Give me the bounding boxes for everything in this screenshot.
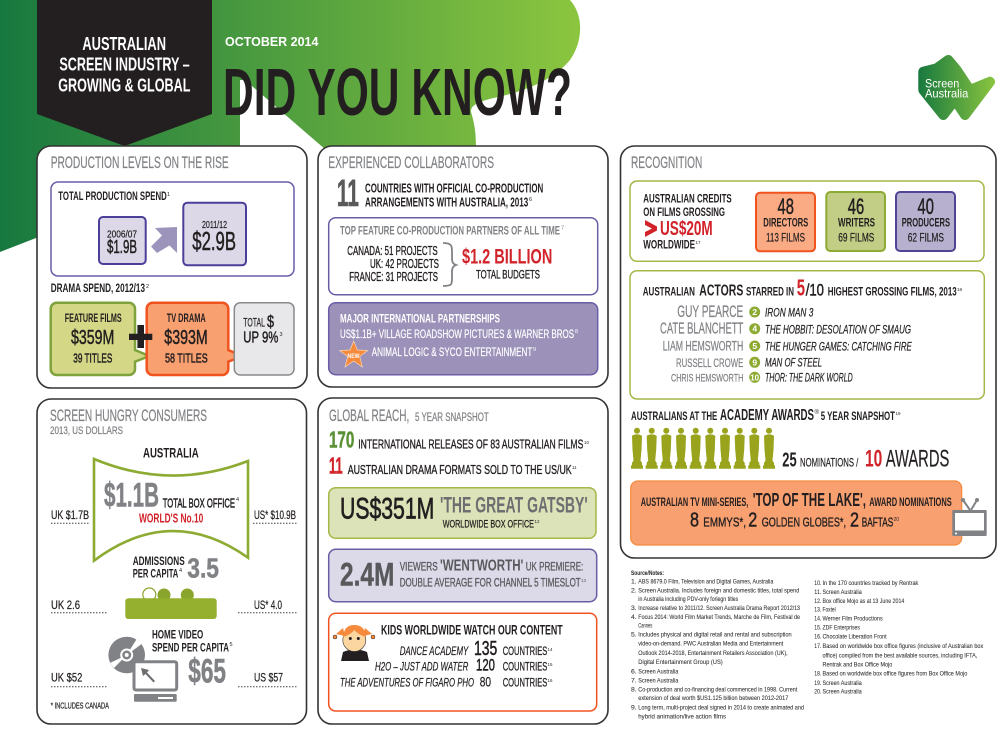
- top partners box: $1.2 BILLION: [462, 245, 552, 268]
- drama formats: AUSTRALIAN DRAMA FORMATS SOLD TO THE US/UK: [348, 462, 572, 477]
- box office figures: [104, 477, 239, 525]
- rank badges: 4: [752, 324, 757, 334]
- academy awards heading: ®: [814, 409, 820, 416]
- top partners box: UK: 42 PROJECTS: [370, 257, 439, 271]
- box office figures: $1.1B: [104, 477, 159, 515]
- banner title: SCREEN INDUSTRY –: [59, 54, 190, 75]
- show rows: THE ADVENTURES OF FIGARO PHO: [340, 676, 474, 690]
- actor names: RUSSELL CROWE: [676, 356, 743, 370]
- directors box: 113 FILMS: [766, 231, 805, 245]
- admissions: [133, 553, 219, 584]
- source notes: 8.: [631, 686, 637, 693]
- awards counts: [782, 446, 949, 473]
- top of the lake box: 'TOP OF THE LAKE',: [753, 490, 866, 510]
- writers box: [826, 192, 885, 251]
- box office figures: TOTAL BOX OFFICE: [163, 496, 235, 510]
- banner title: [58, 33, 190, 95]
- us admissions: [238, 598, 298, 613]
- film titles: [765, 306, 912, 385]
- actors heading: 5: [797, 275, 805, 301]
- wentworth box: 'WENTWORTH': [440, 558, 523, 575]
- producers box: 62 FILMS: [908, 231, 944, 245]
- source notes: 17.: [814, 643, 821, 650]
- source notes: in Australia including PDV-only foriegn titles: [638, 596, 739, 603]
- credits box: ON FILMS GROSSING: [643, 205, 725, 219]
- wentworth box: 2.4M: [340, 557, 394, 593]
- uk box office: UK $1.7B: [51, 508, 89, 522]
- heading: GLOBAL REACH,: [329, 407, 409, 425]
- heading: PRODUCTION LEVELS ON THE RISE: [51, 154, 229, 172]
- actors heading: 18: [957, 287, 963, 292]
- tv drama box: TV DRAMA: [167, 313, 206, 325]
- source notes: 11.: [814, 589, 821, 596]
- source notes: Foxtel: [822, 607, 836, 614]
- gatsby box: 12: [534, 519, 540, 524]
- show rows: 16: [548, 678, 553, 683]
- australia label: AUSTRALIA: [143, 444, 199, 460]
- top partners box: FRANCE: 31 PROJECTS: [349, 270, 438, 284]
- credits box: 17: [696, 240, 701, 245]
- icon: girl: [333, 625, 375, 661]
- actors heading: [643, 275, 963, 301]
- actor names: LIAM HEMSWORTH: [663, 339, 743, 354]
- top of the lake box: GOLDEN GLOBES*,: [762, 515, 846, 530]
- top of the lake box: 2: [850, 510, 859, 532]
- rank badges: 10: [750, 373, 760, 382]
- awards counts: 25: [782, 450, 797, 472]
- gatsby box: WORLDWIDE BOX OFFICE: [443, 518, 534, 530]
- international releases: [329, 427, 590, 453]
- icon: new star: [340, 341, 368, 367]
- total up box: UP 9%: [243, 330, 278, 347]
- writers box: 69 FILMS: [838, 231, 874, 245]
- awards counts: AWARDS: [886, 446, 949, 473]
- panel: global reach: [318, 398, 608, 724]
- home video: SPEND PER CAPITA: [152, 641, 229, 655]
- wentworth box: DOUBLE AVERAGE FOR CHANNEL 5 TIMESLOT: [400, 576, 581, 590]
- academy awards heading: 19: [896, 411, 901, 416]
- actors box: [630, 271, 984, 399]
- plus sign: [129, 325, 152, 348]
- rank badges: [749, 306, 760, 383]
- heading: EXPERIENCED COLLABORATORS: [328, 154, 494, 172]
- uk home video: UK $52: [51, 671, 83, 685]
- top of the lake box: 20: [894, 517, 899, 523]
- top of the lake box: [631, 481, 962, 545]
- source notes: [631, 570, 984, 721]
- us box office: [253, 508, 297, 523]
- partnerships box: 9: [533, 347, 536, 353]
- source notes: Increase relative to 2011/12. Screen Australia Drama Report 2012/13: [638, 605, 800, 612]
- heading suffix: 5 YEAR SNAPSHOT: [415, 412, 489, 424]
- awards counts: 10: [865, 446, 882, 473]
- film titles: THOR: THE DARK WORLD: [765, 371, 853, 385]
- source notes: 3.: [631, 605, 637, 612]
- actors heading: AUSTRALIAN: [643, 285, 695, 299]
- admissions: PER CAPITA: [133, 567, 179, 581]
- actors heading: STARRED IN: [746, 285, 794, 299]
- show rows: DANCE ACADEMY: [400, 644, 469, 658]
- source notes: Focus 2014: World Film Market Trends, Marche de Film, Festival de: [638, 614, 800, 621]
- total up box: [234, 303, 294, 375]
- show rows: [340, 638, 553, 690]
- source notes: 19.: [814, 680, 821, 687]
- source notes: Digital Entertainment Group (US): [638, 659, 723, 666]
- total production spend box: TOTAL PRODUCTION SPEND: [58, 191, 167, 203]
- heading: SCREEN HUNGRY CONSUMERS: [50, 407, 207, 425]
- writers box: WRITERS: [838, 216, 875, 230]
- credits box: US$20M: [660, 218, 713, 240]
- partnerships box: MAJOR INTERNATIONAL PARTNERSHIPS: [340, 311, 500, 325]
- partnerships box: [329, 303, 598, 375]
- admissions: 4: [179, 568, 182, 574]
- wentworth box: 13: [581, 578, 587, 583]
- total production spend box: 1: [167, 192, 170, 198]
- eleven countries: [337, 173, 543, 215]
- film titles: IRON MAN 3: [765, 306, 814, 320]
- 2006/07 value: $1.9B: [107, 237, 137, 257]
- source notes: video-on-demand. PWC Australian Media and Entertainment: [638, 641, 783, 648]
- top partners box: [329, 218, 598, 295]
- total production spend box: [51, 182, 294, 276]
- source notes: Werner Film Productions: [822, 616, 883, 623]
- international releases: 10: [584, 440, 590, 445]
- tv drama box: $393M: [164, 327, 208, 349]
- actor names: [660, 302, 744, 385]
- source notes: Box office Mojo as at 13 June 2014: [822, 598, 904, 605]
- show rows: COUNTRIES: [503, 644, 547, 658]
- drama formats: 11: [572, 465, 577, 470]
- icon: cinema seats: [125, 588, 217, 619]
- producers box: [896, 192, 955, 251]
- source notes: Screen Australia: [822, 680, 862, 687]
- source notes: 10.: [814, 580, 821, 587]
- top partners box: TOTAL BUDGETS: [476, 267, 540, 281]
- oscar statuettes: [631, 428, 775, 469]
- directors box: 48: [778, 194, 794, 219]
- arrow up: [151, 227, 177, 253]
- wentworth box: [329, 549, 597, 602]
- film titles: THE HUNGER GAMES: CATCHING FIRE: [765, 340, 912, 354]
- film titles: MAN OF STEEL: [765, 356, 822, 370]
- source notes: Source/Notes:: [631, 570, 664, 577]
- academy awards heading: AUSTRALIANS AT THE: [631, 409, 717, 423]
- icon: dvd and computer: [108, 637, 177, 702]
- source notes: 12.: [814, 598, 821, 605]
- feature films box: 39 TITLES: [73, 350, 113, 365]
- source notes: Includes physical and digital retail and rental and subscription: [638, 632, 792, 639]
- drama spend label: DRAMA SPEND, 2012/13: [51, 283, 145, 295]
- show rows: H2O – JUST ADD WATER: [375, 659, 469, 673]
- home video: [152, 628, 233, 690]
- 2006/07 value: [99, 217, 146, 264]
- black banner: [37, 0, 212, 146]
- directors box: [756, 193, 815, 251]
- banner title: GROWING & GLOBAL: [58, 74, 190, 95]
- source notes: ABS 8679.0 Film, Television and Digital Games, Australia: [638, 578, 773, 585]
- total up box: 3: [280, 332, 283, 338]
- source notes: Based on worldwide box office figures from Box Office Mojo: [822, 671, 967, 678]
- admissions: ADMISSIONS: [133, 554, 185, 568]
- home video: $65: [188, 652, 226, 690]
- uk admissions: UK 2.6: [51, 598, 80, 612]
- rank badges: 5: [752, 341, 757, 351]
- box office figures: 4: [236, 497, 239, 503]
- 2011/12 value: $2.9B: [192, 226, 236, 256]
- gatsby box: 'THE GREAT GATSBY': [440, 492, 588, 517]
- source notes: Cannes: [638, 623, 653, 630]
- logo: Screen Australia: [923, 60, 990, 115]
- total up box: TOTAL: [243, 318, 265, 330]
- green header background: [0, 0, 580, 252]
- show rows: 80: [480, 674, 491, 690]
- subheading: 2013, US DOLLARS: [50, 425, 123, 437]
- eleven countries: ARRANGEMENTS WITH AUSTRALIA, 2013: [365, 196, 528, 210]
- eleven countries: 11: [337, 173, 359, 215]
- tv drama box: 58 TITLES: [165, 350, 208, 365]
- feature films box: $359M: [71, 327, 114, 349]
- wentworth box: UK PREMIERE:: [526, 560, 583, 574]
- brace: [443, 243, 456, 286]
- eleven countries: COUNTRIES WITH OFFICIAL CO-PRODUCTION: [365, 181, 543, 195]
- source notes: Screen Australia. Includes foreign and domestic titles, total spend: [638, 587, 799, 594]
- directors box: DIRECTORS: [763, 216, 808, 230]
- rank badges: 2: [752, 307, 757, 317]
- source notes: 9.: [631, 704, 637, 711]
- credits box: AUSTRALIAN CREDITS: [643, 191, 732, 205]
- international releases: 170: [329, 427, 354, 453]
- icon: television: [952, 498, 987, 536]
- source notes: In the 170 countries tracked by Rentrak: [822, 580, 919, 587]
- actor names: GUY PEARCE: [677, 302, 743, 321]
- rank badges: 9: [752, 357, 757, 367]
- producers box: 40: [918, 194, 934, 219]
- show rows: 120: [476, 655, 495, 674]
- uk admissions: [51, 598, 107, 613]
- main title: DID YOU KNOW?: [223, 55, 572, 130]
- home video: 5: [230, 642, 233, 648]
- top of the lake box: BAFTAS: [862, 515, 894, 530]
- source notes: Co-production and co-financing deal commenced in 1998. Current: [638, 686, 797, 693]
- source notes: Screen Australia: [822, 589, 862, 596]
- panel: experienced collaborators: [318, 146, 608, 387]
- wentworth box: VIEWERS: [400, 560, 438, 574]
- partnerships box: 8: [575, 329, 578, 335]
- heading: RECOGNITION: [631, 154, 702, 172]
- logo: Screen Australia: Screen: [925, 77, 959, 91]
- feature films box: [51, 303, 149, 375]
- panel: screen hungry consumers: [37, 399, 306, 724]
- source notes: 2.: [631, 587, 637, 594]
- actors heading: ACTORS: [699, 283, 744, 300]
- source notes: 14.: [814, 616, 821, 623]
- international releases: INTERNATIONAL RELEASES OF 83 AUSTRALIAN FILMS: [358, 436, 584, 451]
- home video: HOME VIDEO: [152, 628, 203, 642]
- box office figures: WORLD'S No.10: [139, 510, 203, 525]
- total up box: $: [267, 312, 274, 331]
- show rows: 135: [474, 638, 497, 660]
- gatsby box: US$351M: [340, 492, 434, 525]
- source notes: Outlook 2014-2018, Entertainment Retailers Association (UK),: [638, 650, 788, 657]
- us home video: US $57: [254, 671, 283, 685]
- panel: production levels: 2: [146, 284, 149, 290]
- academy awards heading: ACADEMY AWARDS: [720, 407, 814, 424]
- gatsby box: [329, 488, 596, 538]
- kids box: KIDS WORLDWIDE WATCH OUR CONTENT: [381, 621, 563, 637]
- top of the lake box: AUSTRALIAN TV MINI-SERIES,: [641, 497, 748, 509]
- writers box: 46: [848, 194, 864, 219]
- footnote: * INCLUDES CANADA: [51, 701, 109, 710]
- source notes: hybrid animation/live action films: [638, 714, 727, 721]
- actor names: CATE BLANCHETT: [660, 321, 744, 338]
- eleven countries: 6: [529, 197, 532, 203]
- panel: recognition: [620, 146, 996, 558]
- actors heading: /10: [806, 281, 824, 300]
- drama formats: 11: [329, 453, 343, 479]
- 2011/12 value: [183, 203, 246, 265]
- source notes: 15.: [814, 625, 821, 632]
- top of the lake box: 8: [690, 510, 699, 532]
- cinema screen banner: [94, 459, 248, 561]
- source notes: 4.: [631, 614, 637, 621]
- date: OCTOBER 2014: [225, 34, 319, 49]
- panel: production levels: [37, 146, 307, 388]
- 2006/07 value: 2006/07: [107, 230, 137, 241]
- show rows: COUNTRIES: [503, 659, 547, 673]
- admissions: 3.5: [187, 553, 219, 584]
- banner title: AUSTRALIAN: [82, 33, 166, 54]
- partnerships box: US$1.1B+ VILLAGE ROADSHOW PICTURES & WARNER BROS: [340, 327, 574, 341]
- source notes: 6.: [631, 668, 637, 675]
- top partners box: 7: [561, 226, 564, 232]
- top of the lake box: AWARD NOMINATIONS: [869, 497, 952, 509]
- awards counts: NOMINATIONS /: [800, 456, 859, 470]
- source notes: ZDF Enterprises: [822, 625, 860, 632]
- producers box: PRODUCERS: [902, 216, 950, 230]
- film titles: THE HOBBIT: DESOLATION OF SMAUG: [765, 322, 911, 336]
- show rows: 15: [548, 662, 553, 667]
- us box office: US* $10.9B: [254, 508, 296, 522]
- source notes: 5.: [631, 632, 637, 639]
- 2011/12 value: 2011/12: [202, 220, 227, 231]
- source notes: Rentrak and Box Office Mojo: [822, 662, 892, 669]
- credits box: WORLDWIDE: [643, 237, 695, 251]
- source notes: 13.: [814, 607, 821, 614]
- source notes: Screen Australia: [638, 677, 678, 684]
- top of the lake box: EMMYS*,: [703, 515, 746, 530]
- icon: new star: NEW: [348, 353, 360, 360]
- source notes: 7.: [631, 677, 637, 684]
- us home video: [238, 671, 298, 687]
- top of the lake box: 2: [748, 510, 757, 532]
- source notes: 20.: [814, 689, 821, 696]
- source notes: Screen Australia: [822, 689, 862, 696]
- credits box: [630, 181, 984, 261]
- source notes: Long term, multi-project deal signed in 2014 to create animated and: [638, 704, 804, 711]
- top partners box: TOP FEATURE CO-PRODUCTION PARTNERS OF ALL TIME: [340, 224, 560, 238]
- partnerships box: ANIMAL LOGIC & SYCO ENTERTAINMENT: [372, 345, 533, 359]
- academy awards heading: 5 YEAR SNAPSHOT: [821, 409, 895, 423]
- source notes: extension of deal worth $US1.125 billion between 2012-2017: [638, 695, 788, 702]
- tv drama box: [147, 303, 242, 375]
- show rows: 14: [548, 647, 553, 652]
- source notes: Screen Australia: [638, 668, 678, 675]
- top partners box: CANADA: 51 PROJECTS: [347, 244, 438, 258]
- uk home video: [51, 671, 107, 687]
- logo: Screen Australia: Australia: [925, 86, 969, 100]
- feature films box: FEATURE FILMS: [65, 313, 122, 325]
- kids box: [329, 613, 597, 711]
- show rows: COUNTRIES: [503, 676, 547, 690]
- source notes: 1.: [631, 578, 637, 585]
- source notes: 18.: [814, 671, 821, 678]
- greater-than chevron: [645, 220, 657, 237]
- source notes: 16.: [814, 634, 821, 641]
- actor names: CHRIS HEMSWORTH: [671, 373, 743, 385]
- drama formats: [329, 453, 577, 479]
- academy awards heading: [631, 407, 901, 424]
- us admissions: US* 4.0: [254, 598, 282, 612]
- source notes: Chocolate Liberation Front: [822, 634, 887, 641]
